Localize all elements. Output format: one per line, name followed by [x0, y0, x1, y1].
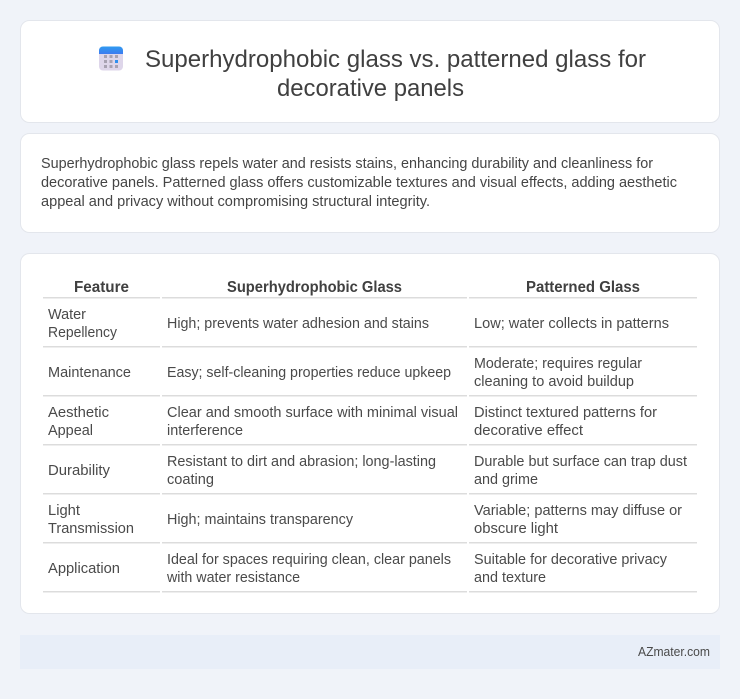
panel: title header	[20, 20, 720, 122]
row: aesthetic appeal: Clear and smooth surface with minimal visual	[167, 405, 458, 421]
table header row: Superhydrophobic Glass	[227, 279, 402, 296]
panel: intro text: Superhydrophobic glass repels water and resists stains, enhancing durability and cleanliness for	[41, 156, 653, 172]
row: aesthetic appeal: Appeal	[48, 423, 93, 439]
table header row: Patterned Glass	[526, 279, 640, 296]
panel: comparison table	[20, 254, 720, 614]
table header row: Feature	[74, 279, 129, 296]
row: light transmission: Light	[48, 503, 80, 519]
row: application: Application	[48, 561, 120, 577]
panel: intro text: appeal and privacy without compromising structural integrity.	[41, 194, 430, 210]
row: application	[43, 552, 697, 592]
row: application: and texture	[474, 570, 546, 586]
row: maintenance: Moderate; requires regular	[474, 356, 642, 372]
row: application: Suitable for decorative privacy	[474, 552, 668, 568]
title: decorative panels	[277, 75, 464, 102]
table header row	[43, 279, 697, 298]
row: light transmission: Variable; patterns may diffuse or	[474, 503, 682, 519]
row: maintenance	[43, 356, 697, 396]
row: maintenance: cleaning to avoid buildup	[474, 374, 634, 390]
panel: intro text: decorative panels. Patterned glass offers customizable textures and visual effects, adding aesthetic	[41, 175, 677, 191]
row: durability: Durable but surface can trap dust	[474, 454, 687, 470]
panel: intro text	[20, 134, 720, 232]
row: aesthetic appeal: interference	[167, 423, 243, 439]
row: aesthetic appeal: Aesthetic	[48, 405, 109, 421]
row: water repellency: Water	[48, 307, 86, 323]
row: maintenance: Easy; self-cleaning properties reduce upkeep	[167, 365, 451, 381]
row: application: with water resistance	[166, 570, 300, 586]
row: application: Ideal for spaces requiring clean, clear panels	[167, 552, 451, 568]
row: aesthetic appeal: decorative effect	[474, 423, 583, 439]
row: aesthetic appeal: Distinct textured patterns for	[474, 405, 657, 421]
row: durability: Durability	[48, 463, 111, 479]
row: maintenance: Maintenance	[48, 365, 131, 381]
row: light transmission: obscure light	[474, 521, 558, 537]
row: light transmission	[43, 503, 697, 544]
row: water repellency	[43, 307, 697, 348]
row: light transmission: Transmission	[48, 521, 134, 537]
row: water repellency: Low; water collects in patterns	[474, 316, 669, 332]
title: Superhydrophobic glass vs. patterned glass for	[145, 46, 646, 73]
row: water repellency: High; prevents water adhesion and stains	[167, 316, 429, 332]
row: durability	[43, 454, 697, 494]
title	[145, 46, 646, 102]
row: durability: and grime	[474, 472, 538, 488]
row: light transmission: High; maintains transparency	[167, 512, 354, 528]
icon: calendar	[99, 46, 123, 70]
footer	[20, 635, 720, 669]
row: durability: Resistant to dirt and abrasion; long-lasting	[167, 454, 436, 470]
footer: AZmater.com	[638, 644, 710, 659]
row: aesthetic appeal	[43, 405, 697, 446]
row: water repellency: Repellency	[48, 325, 118, 341]
row: durability: coating	[167, 472, 214, 488]
